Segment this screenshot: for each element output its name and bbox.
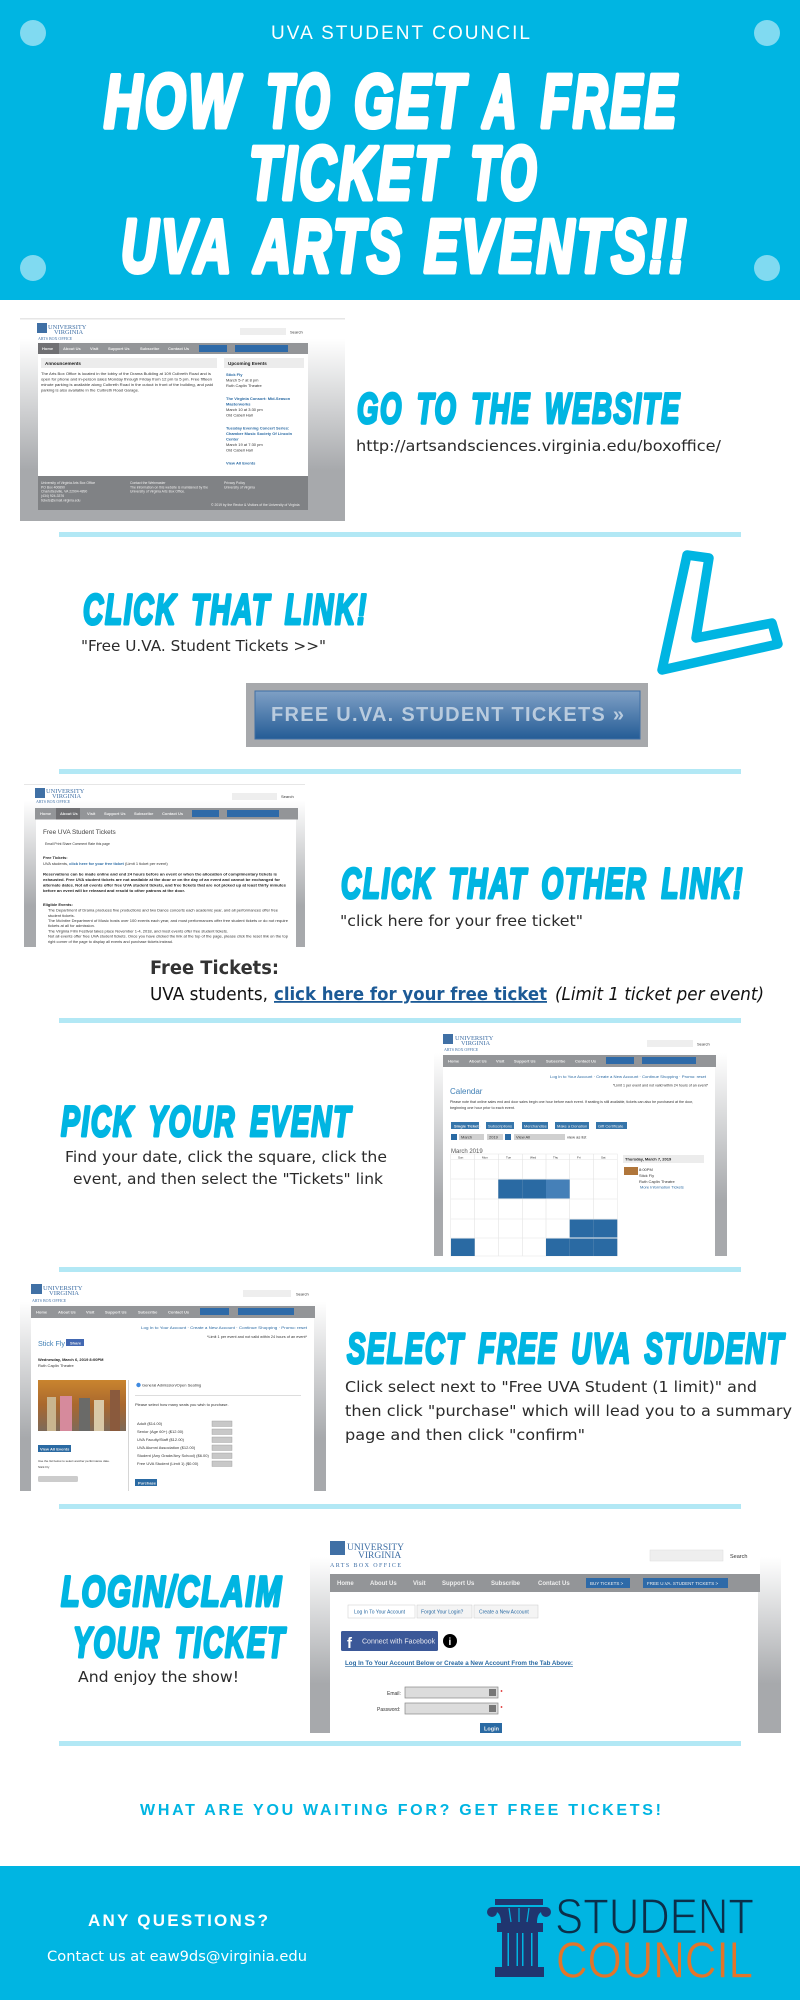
step 1 screenshot: box office home page: Upcoming Events	[228, 361, 267, 366]
step 6 heading: YOUR TICKET	[73, 1619, 287, 1667]
step 1 screenshot: box office home page: tickets@email.virginia.edu	[41, 498, 81, 502]
step 5 screenshot: event ticket selection: About Us	[58, 1310, 77, 1314]
step 6 screenshot: login page: Subscribe	[491, 1581, 521, 1587]
calendar grid: Mon	[482, 1156, 488, 1160]
step 1 screenshot: box office home page: March 19 at 7:30 pm	[226, 442, 263, 447]
step 1 screenshot: box office home page: Contact Us	[168, 346, 190, 351]
step 3 screenshot: free student tickets page: Visit	[87, 811, 96, 816]
title: FREE	[541, 59, 679, 143]
step 5 screenshot: event ticket selection: Senior (Age 60+) ($12.00)	[137, 1429, 184, 1434]
logo: VIRGINIA	[54, 329, 83, 336]
step 6 screenshot: login page: About Us	[370, 1581, 397, 1587]
step 1 screenshot: box office home page: Support Us	[108, 346, 130, 351]
step 1 screenshot: box office home page: The information on this website is maintained by the	[130, 486, 208, 490]
logo	[330, 1541, 404, 1569]
step 1 screenshot: box office home page: Home	[42, 346, 54, 351]
logo: UNIVERSITY	[48, 324, 87, 331]
step 5 screenshot: event ticket selection: Use the list below to select another performance date.	[38, 1459, 110, 1463]
step 3 screenshot: free student tickets page: About Us	[60, 811, 79, 816]
step 3 screenshot: free student tickets page: alternate dates. Not all events offer free UVA student tickets, and free tickets that are not picked up at least thirty minutes	[43, 882, 287, 888]
step 6 screenshot: login page: Create a New Account	[479, 1610, 529, 1616]
step 1 screenshot: box office home page: The Virginia Consort: Mid-Season	[226, 396, 291, 401]
step 4 screenshot: calendar: Stick Fly	[639, 1173, 654, 1178]
step 4 screenshot: calendar: Calendar	[450, 1087, 483, 1096]
facebook connect button	[341, 1631, 438, 1652]
calendar grid: Tue	[506, 1156, 511, 1160]
step 1 screenshot: box office home page: Contact the Webmaster	[130, 481, 166, 485]
step 3 link detail crop: click here for your free ticket	[274, 984, 547, 1005]
step 3 screenshot: free student tickets page: Free Tickets:	[43, 855, 68, 860]
step 6 screenshot: login page: Forgot Your Login?	[421, 1610, 463, 1616]
title: EVENTS!!	[424, 204, 689, 288]
step 4 screenshot: calendar: Visit	[496, 1058, 505, 1064]
step 5 screenshot: event ticket selection	[20, 1280, 326, 1491]
step 5 screenshot: event ticket selection: General Admission/Open Seating	[142, 1382, 201, 1388]
step 1 screenshot: box office home page: Center	[226, 436, 239, 442]
info icon	[443, 1634, 457, 1648]
step 1 screenshot: box office home page: March 5-7 at 8 pm	[226, 378, 259, 382]
step 3 link detail crop: Free Tickets:	[150, 958, 279, 979]
step 4 screenshot: calendar: More Information Tickets	[640, 1184, 684, 1190]
title: HOW	[104, 59, 243, 143]
step 4 screenshot: calendar: Contact Us	[575, 1058, 597, 1064]
step 5 screenshot: event ticket selection: Search	[296, 1292, 309, 1296]
logo: VIRGINIA	[461, 1040, 490, 1047]
step 5 screenshot: event ticket selection: Wednesday, March 6, 2019 8:00PM	[38, 1357, 104, 1362]
step 4 screenshot: calendar: Subscribe	[546, 1058, 566, 1064]
step 4 screenshot: calendar	[434, 1030, 727, 1256]
step 4 screenshot: calendar: 2019	[489, 1134, 499, 1140]
calendar grid: Fri	[577, 1156, 581, 1160]
step 4 screenshot: calendar: March 2019	[451, 1149, 483, 1155]
step 6 screenshot: login page	[310, 1537, 781, 1733]
step 5 screenshot: event ticket selection: Please select how many seats you wish to purchase.	[135, 1402, 229, 1407]
decorative corner dots	[20, 20, 780, 281]
step 5 screenshot: event ticket selection: Purchase	[138, 1480, 157, 1486]
step 4 heading: PICK YOUR EVENT	[61, 1098, 353, 1146]
footer questions heading: ANY QUESTIONS?	[88, 1911, 268, 1930]
step 3 screenshot: free student tickets page: Search	[281, 794, 294, 799]
step 1 screenshot: box office home page: parking is also available in the Culbreth Road Garage.	[41, 388, 139, 392]
logo: ARTS BOX OFFICE	[330, 1563, 401, 1569]
step 3 screenshot: free student tickets page: The Department of Drama produces five productions and two Dance concerts each academic year, and all performances offer free	[48, 908, 279, 912]
step 5 screenshot: event ticket selection: Log In to Your Account · Create a New Account · Continue Shopping · Promo: reset	[141, 1325, 308, 1330]
step 3 screenshot: free student tickets page: Not all events offer free UVA student tickets. Once you have clicked the link at the top of the page, please click the reset link on the top	[48, 934, 289, 938]
step 1 screenshot: box office home page: University of Virginia Arts Box Office	[41, 481, 95, 485]
step 5 screenshot: event ticket selection: *Limit 1 per event and not valid within 24 hours of an event*	[207, 1334, 307, 1339]
step 1 screenshot: box office home page: Ruth Caplin Theatre	[226, 383, 262, 388]
step 4 screenshot: calendar: Log In to Your Account · Create a New Account · Continue Shopping · Promo: reset	[550, 1074, 707, 1079]
step 5 description: page and then click "confirm"	[345, 1426, 585, 1444]
step 4 description	[65, 1148, 387, 1188]
step 5 screenshot: event ticket selection: Visit	[86, 1310, 95, 1314]
step 6 screenshot: login page: FREE U.VA. STUDENT TICKETS >	[647, 1581, 719, 1586]
step 4 screenshot: calendar: *Limit 1 per event and not valid within 24 hours of an event*	[613, 1082, 708, 1088]
title: UVA	[121, 204, 234, 288]
logo: VIRGINIA	[358, 1551, 401, 1561]
logo: UNIVERSITY	[455, 1035, 494, 1042]
step 5 screenshot: event ticket selection: Student (Any Grade/Any School) ($6.00)	[137, 1453, 209, 1458]
step 3 screenshot: free student tickets page: The McIntire Department of Music hosts over 100 events each year, and most performances offer free student tickets or do not require	[48, 918, 289, 923]
step 6 screenshot: login page: Search	[730, 1554, 747, 1560]
step 5 screenshot: event ticket selection: Home	[36, 1310, 48, 1314]
step 4 description: event, and then select the "Tickets" link	[73, 1170, 383, 1188]
calendar grid: Wed	[530, 1156, 536, 1160]
step 5 screenshot: event ticket selection: UVA Faculty/Staff ($12.00)	[137, 1437, 185, 1442]
step 1 screenshot: box office home page: Old Cabell Hall	[226, 412, 253, 418]
logo wordmark	[555, 1888, 754, 1988]
step 1 screenshot: box office home page: University of Virginia Arts Box Office.	[130, 490, 185, 494]
title	[104, 59, 689, 288]
step 3 description: "click here for your free ticket"	[340, 912, 583, 930]
logo: UNIVERSITY	[43, 1285, 83, 1292]
logo	[443, 1034, 494, 1052]
step 1 screenshot: box office home page: March 10 at 3:30 pm	[226, 407, 263, 412]
step 6 description: And enjoy the show!	[78, 1668, 239, 1686]
step 3 screenshot: free student tickets page: Reservations can be made online and end 24 hours before an event or when the allocation of complimentary tickets is	[43, 872, 278, 876]
step 1 screenshot: box office home page: Tuesday Evening Concert Series:	[226, 426, 289, 430]
step 4 screenshot: calendar: Thursday, March 7, 2019	[625, 1156, 672, 1162]
step 6 screenshot: login page: Support Us	[442, 1581, 475, 1587]
step 1 screenshot: box office home page: Charlottesville, VA 22904-4890	[41, 490, 87, 494]
step 1 screenshot: box office home page: University of Virginia	[224, 486, 255, 490]
step 3 link detail crop	[150, 958, 764, 1005]
step 1 screenshot: box office home page: View All Events	[226, 460, 256, 466]
step 3 screenshot: free student tickets page: before an event will be released and resold to other patrons at the door.	[43, 888, 185, 893]
logo wordmark: STUDENT	[555, 1888, 754, 1944]
step 5 screenshot: event ticket selection: UVA Alumni Association ($12.00)	[137, 1445, 196, 1450]
logo: VIRGINIA	[52, 793, 81, 800]
step 3 screenshot: free student tickets page: UVA students, click here for your free ticket (Limit 1 ticket per event)	[43, 861, 168, 866]
step 4 screenshot: calendar: Home	[448, 1058, 460, 1064]
step 3 screenshot: free student tickets page	[24, 784, 305, 947]
logo: UNIVERSITY	[347, 1543, 404, 1553]
step 1 screenshot: box office home page	[20, 318, 345, 521]
step 3 screenshot: free student tickets page: exhausted. Free UVA student tickets are not available at the door or on the day of an event and cannot be exchanged for	[43, 877, 280, 882]
header banner	[0, 0, 800, 300]
step 5 description: Click select next to "Free UVA Student (1 limit)" and	[345, 1378, 757, 1396]
step 2 heading: CLICK THAT LINK!	[83, 586, 368, 634]
footer band	[0, 1866, 800, 2000]
step 6 screenshot: login page: Login	[484, 1726, 500, 1732]
info icon: i	[448, 1637, 452, 1648]
event photo	[38, 1380, 126, 1431]
step 1 screenshot: box office home page: About Us	[63, 346, 82, 351]
logo: VIRGINIA	[49, 1290, 79, 1297]
step 1 screenshot: box office home page: Old Cabell Hall	[226, 448, 253, 452]
step 5 description	[345, 1378, 792, 1444]
step 1 screenshot: box office home page: Subscribe	[140, 346, 160, 351]
step 5 description: then click "purchase" which will lead you to a summary	[345, 1402, 792, 1420]
step 4 screenshot: calendar: Merchandise	[524, 1124, 548, 1128]
step 6 screenshot: login page: Log In To Your Account	[354, 1610, 406, 1616]
step 3 screenshot: free student tickets page: Contact Us	[162, 811, 184, 816]
title: ARTS	[253, 204, 404, 288]
step 1 screenshot: box office home page: Visit	[90, 346, 99, 351]
step 5 screenshot: event ticket selection: Adult ($14.00)	[137, 1421, 163, 1426]
step 3 screenshot: free student tickets page: Email Print Share Comment Rate this page	[45, 842, 110, 846]
logo: ARTS BOX OFFICE	[32, 1298, 67, 1303]
step 3 screenshot: free student tickets page: The Virginia Film Festival takes place November 1-4, 2018, and most events offer free student tickets.	[48, 928, 228, 934]
logo: ARTS BOX OFFICE	[36, 799, 71, 804]
step 1 screenshot: box office home page: Masterworks	[226, 402, 251, 406]
step 3 screenshot: free student tickets page: tickets at all for admission.	[48, 923, 95, 928]
step 5 screenshot: event ticket selection: Stick Fly	[38, 1465, 50, 1469]
step 1 screenshot: box office home page: open for phone and in-person sales Monday through Friday from 12 pm to 5 pm. Free fifteen	[41, 376, 212, 382]
step 3 screenshot: free student tickets page: right corner of the page to display all events and purchase tickets instead.	[48, 939, 173, 944]
step 6 heading	[61, 1568, 287, 1667]
step 2 description: "Free U.VA. Student Tickets >>"	[81, 637, 326, 655]
step 3 screenshot: free student tickets page: Subscribe	[134, 811, 154, 816]
organisation name: UVA STUDENT COUNCIL	[271, 23, 530, 44]
logo	[35, 788, 85, 804]
title: TO	[266, 59, 332, 143]
step 4 screenshot: calendar: Search	[697, 1042, 710, 1046]
logo wordmark: COUNCIL	[556, 1932, 753, 1988]
step 5 screenshot: event ticket selection: Contact Us	[168, 1310, 190, 1314]
logo: ARTS BOX OFFICE	[38, 336, 73, 341]
step 4 screenshot: calendar: Single Tickets	[454, 1124, 482, 1128]
step 4 screenshot: calendar: View All	[516, 1134, 530, 1140]
step 3 screenshot: free student tickets page: Support Us	[104, 811, 126, 816]
step 6 screenshot: login page: Log In To Your Account Below or Create a New Account From the Tab Above:	[345, 1660, 573, 1667]
calendar grid: Thu	[553, 1156, 559, 1160]
step 4 screenshot: calendar: beginning one hour prior to each event.	[450, 1105, 515, 1110]
footer contact: Contact us at eaw9ds@virginia.edu	[47, 1949, 307, 1965]
step 5 screenshot: event ticket selection: Ruth Caplin Theatre	[38, 1363, 74, 1368]
step 4 screenshot: calendar: Gift Certificate	[598, 1124, 624, 1128]
step 6 heading: LOGIN/CLAIM	[61, 1568, 283, 1616]
step 4 screenshot: calendar: Please note that online sales end and door sales begin one hour before each event. If seating is still available, tickets can also be purchased at the door,	[450, 1099, 693, 1104]
step 5 screenshot: event ticket selection: View All Events	[40, 1446, 70, 1452]
step 4 screenshot: calendar: view as list	[567, 1134, 587, 1140]
step 6 screenshot: login page: Contact Us	[538, 1581, 570, 1587]
step 1 screenshot: box office home page: minute parking is available along Culbreth Road in the cutout in front of the building, and paid	[41, 382, 213, 387]
logo	[31, 1284, 83, 1303]
step 6 screenshot: login page: BUY TICKETS >	[590, 1581, 624, 1586]
step 4 screenshot: calendar: About Us	[469, 1058, 488, 1064]
step 1 url: http://artsandsciences.virginia.edu/boxoffice/	[356, 437, 722, 455]
step 1 screenshot: box office home page: Search	[290, 330, 303, 334]
step 5 screenshot: event ticket selection: Support Us	[105, 1310, 127, 1314]
facebook connect button: Connect with Facebook	[362, 1638, 436, 1646]
button image: free student tickets	[246, 683, 648, 747]
step 3 link detail crop: (Limit 1 ticket per event)	[555, 984, 764, 1005]
step 3 screenshot: free student tickets page: Home	[40, 811, 52, 816]
step 1 screenshot: box office home page: Stick Fly	[226, 372, 243, 377]
step 3 screenshot: free student tickets page: Eligible Events:	[43, 902, 73, 907]
step 5 screenshot: event ticket selection: Free UVA Student (Limit 1) ($0.00)	[137, 1461, 199, 1466]
calendar grid	[451, 1154, 617, 1256]
step 4 description: Find your date, click the square, click the	[65, 1148, 387, 1166]
step 1 screenshot: box office home page: © 2019 by the Rector & Visitors of the University of Virginia	[211, 503, 300, 507]
step 4 screenshot: calendar: Make a Donation	[557, 1124, 587, 1128]
logo: UNIVERSITY	[46, 788, 85, 795]
step 6 screenshot: login page: Password:	[377, 1707, 400, 1713]
step 4 screenshot: calendar: March	[461, 1134, 472, 1140]
title: TO	[470, 131, 539, 215]
title: A	[482, 59, 519, 143]
step 4 screenshot: calendar: 8:00PM	[639, 1167, 653, 1172]
icon: column logo	[487, 1899, 551, 1977]
step 3 screenshot: free student tickets page: student tickets.	[48, 913, 75, 918]
step 1 screenshot: box office home page: (434) 924-3376	[41, 494, 64, 498]
facebook connect button: f	[347, 1635, 353, 1652]
step 6 screenshot: login page: Email:	[387, 1691, 401, 1697]
logo	[37, 323, 87, 341]
arrow: large chevron pointing to button	[662, 555, 778, 670]
step 1 screenshot: box office home page: Chamber Music Society Of Lincoln	[226, 431, 293, 436]
step 5 screenshot: event ticket selection: Subscribe	[138, 1310, 158, 1314]
call to action line: WHAT ARE YOU WAITING FOR? GET FREE TICKETS!	[140, 1802, 661, 1819]
calendar grid: Sat	[601, 1156, 606, 1160]
step 1 screenshot: box office home page: Announcements	[45, 361, 81, 366]
step 5 screenshot: event ticket selection: Share	[70, 1340, 82, 1346]
title: GET	[354, 59, 468, 143]
step 1 screenshot: box office home page: Privacy Policy	[224, 481, 245, 485]
step 4 screenshot: calendar: Support Us	[514, 1058, 536, 1064]
step 3 link detail crop: UVA students,	[150, 984, 268, 1005]
step 4 screenshot: calendar: Ruth Caplin Theatre	[639, 1179, 676, 1184]
step 1 screenshot: box office home page: The Arts Box Office is located in the lobby of the Drama Building at 109 Culbreth Road and is	[41, 371, 211, 376]
step 5 screenshot: event ticket selection: Stick Fly	[38, 1339, 65, 1348]
step 3 screenshot: free student tickets page: Free UVA Student Tickets	[43, 829, 116, 836]
step 1 screenshot: box office home page: PO Box 400890	[41, 486, 65, 490]
logo: ARTS BOX OFFICE	[444, 1047, 479, 1052]
step 4 screenshot: calendar: Subscriptions	[488, 1124, 512, 1128]
button image: free student tickets: FREE U.VA. STUDENT TICKETS »	[271, 704, 624, 726]
step 6 screenshot: login page: Visit	[413, 1581, 426, 1587]
title: TICKET	[249, 131, 449, 215]
step 6 screenshot: login page: Home	[337, 1581, 354, 1587]
calendar grid: Sun	[458, 1156, 464, 1160]
